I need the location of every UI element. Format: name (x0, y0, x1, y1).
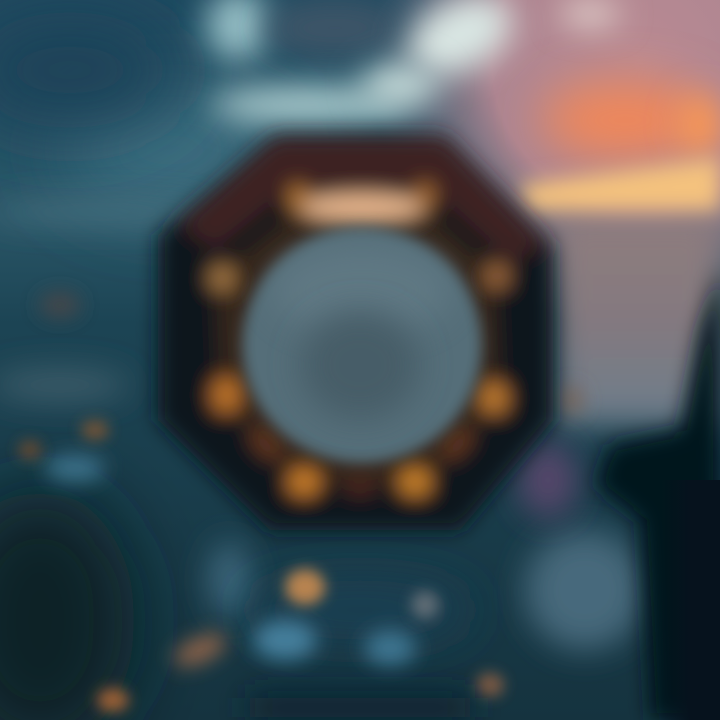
silhouette right edge fill (660, 480, 720, 720)
ring brown top band (180, 138, 545, 262)
octagonal ring (158, 135, 553, 530)
sunset clouds and glow (0, 0, 720, 425)
ring inner opening glow (215, 200, 500, 485)
blurred city foreground (0, 293, 645, 720)
peach upper glow (297, 193, 427, 221)
orange lights on ring (209, 182, 510, 496)
dark silhouette at right (595, 270, 720, 720)
disc concentric shading (272, 245, 452, 420)
ring outer body (158, 135, 553, 530)
central grey disc (242, 227, 482, 463)
